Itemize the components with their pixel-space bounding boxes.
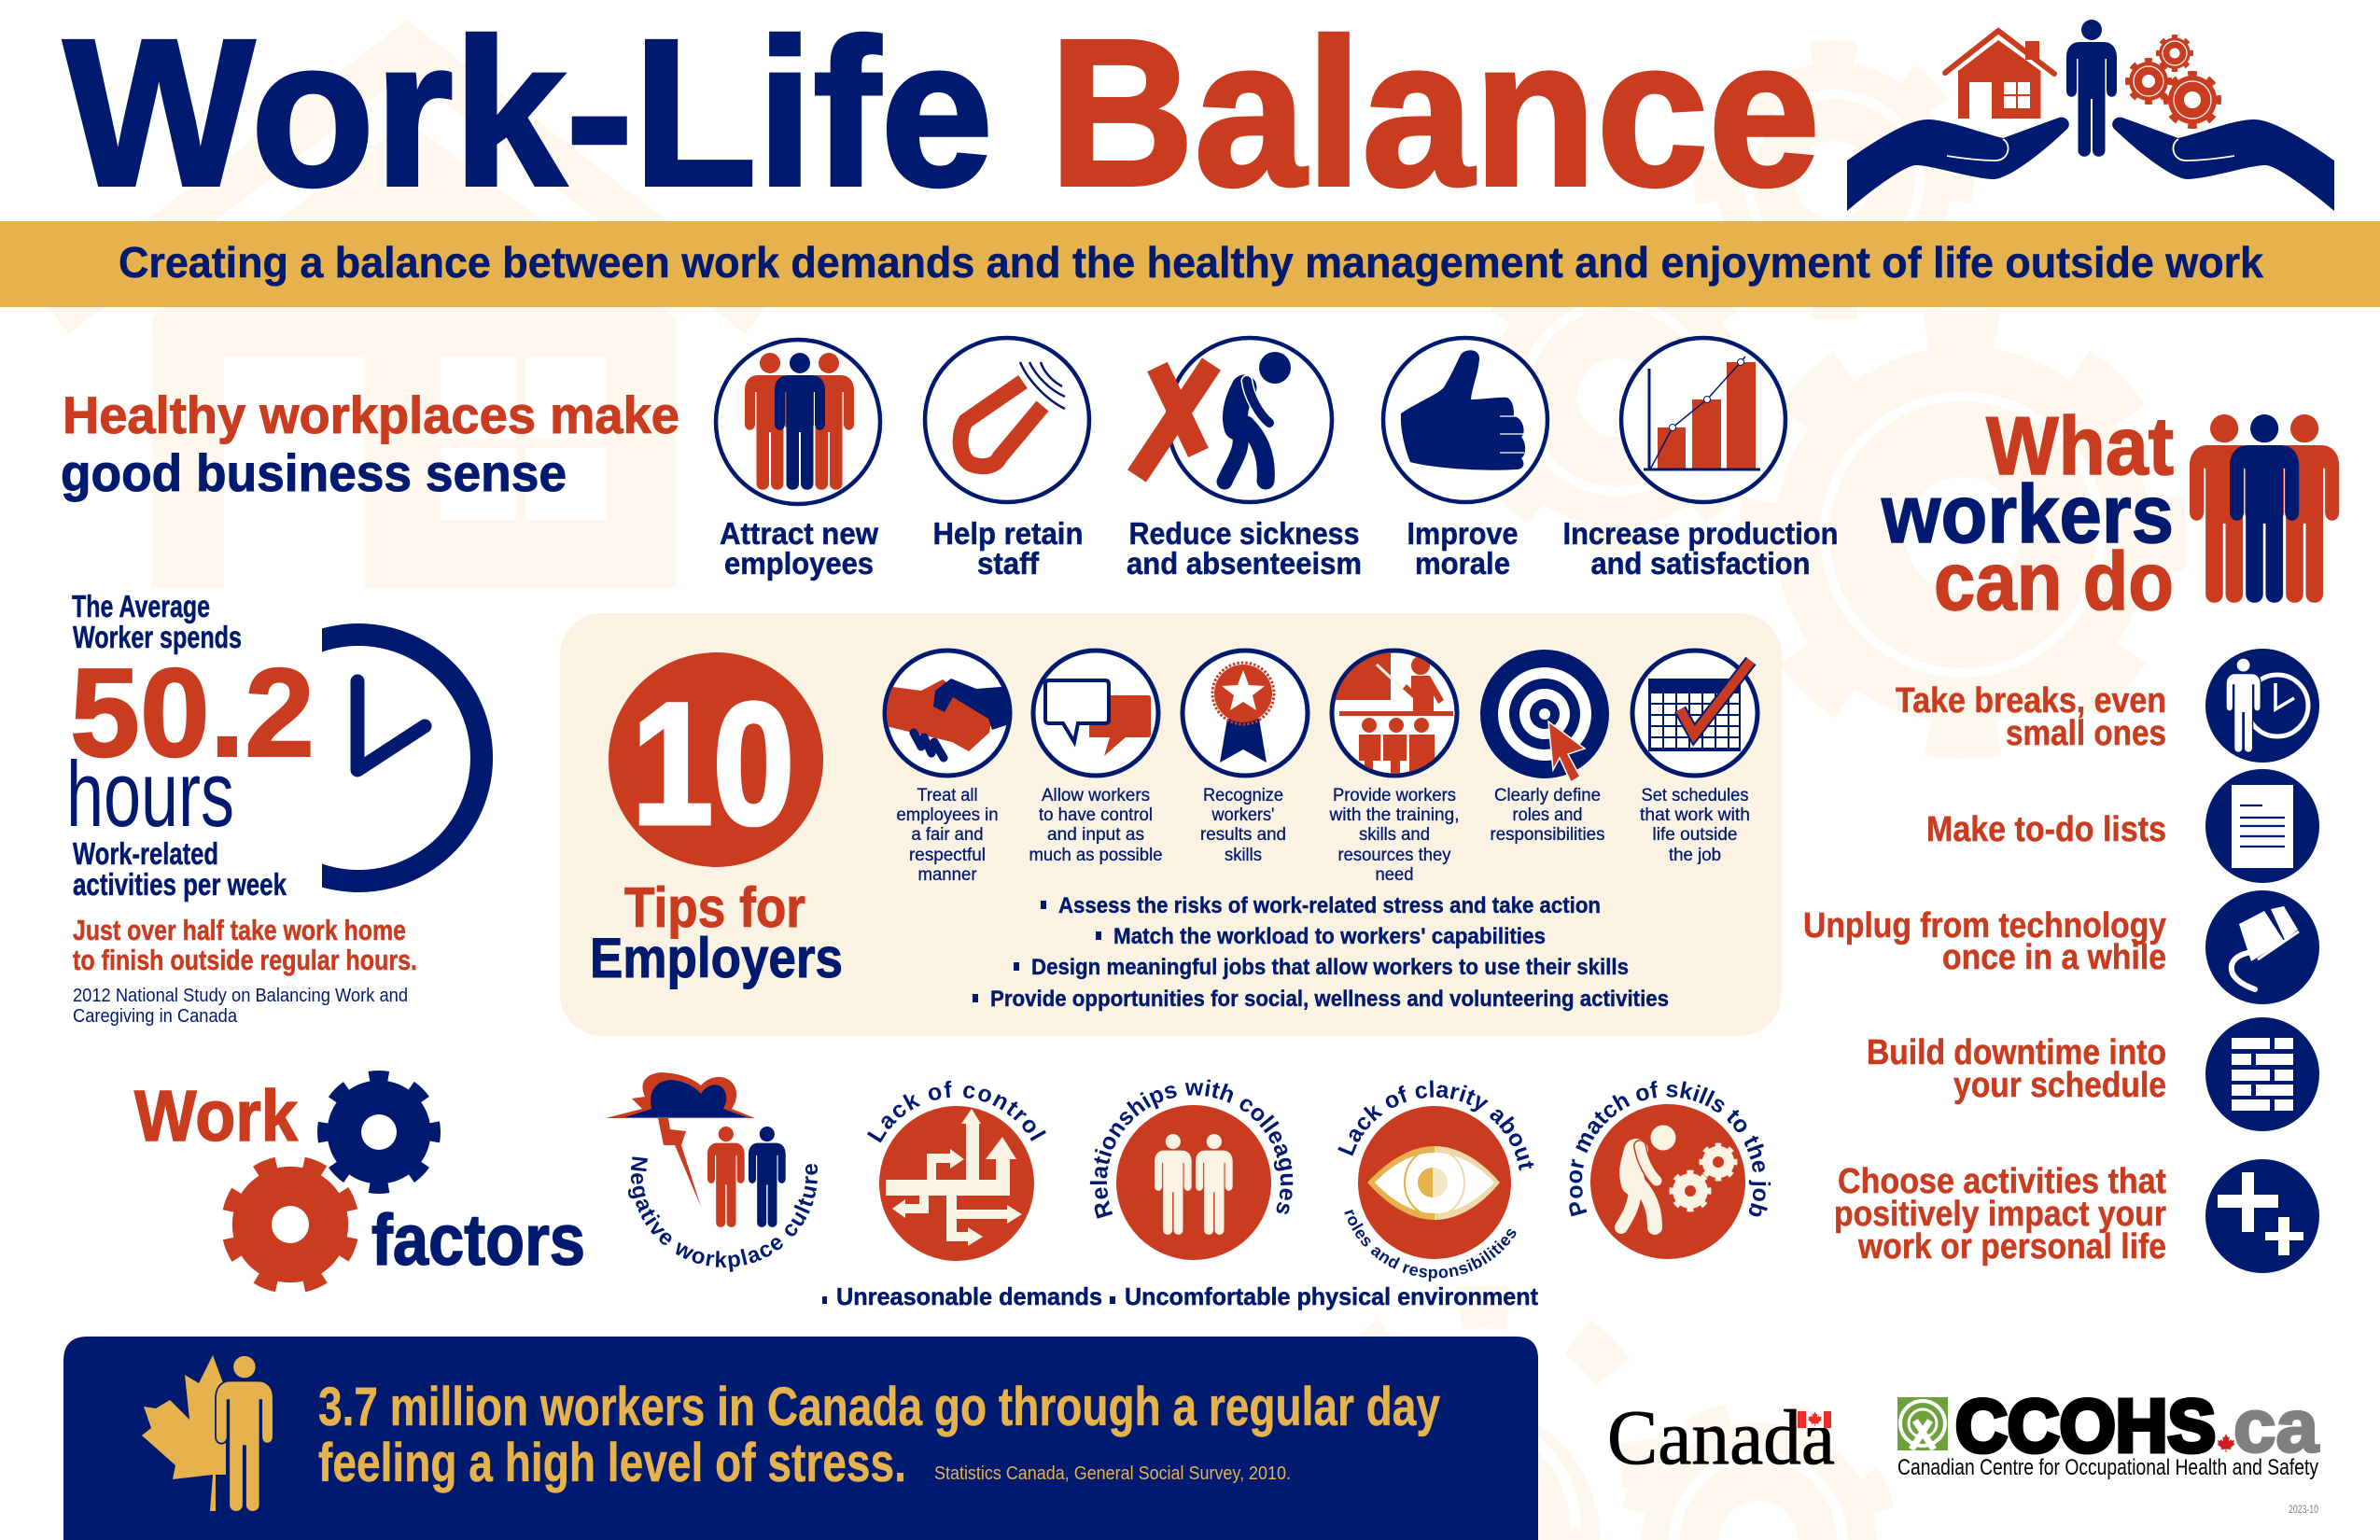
- tip: treat all employees fairly: Treat all: [917, 786, 978, 805]
- tip: allow control and input: [1029, 651, 1163, 865]
- tip: allow control and input: Allow workers: [1042, 786, 1150, 805]
- logo: CCOHS: ca: [2233, 1384, 2319, 1467]
- factor: relationships with colleagues: Relationships with colleagues: [1090, 1079, 1294, 1219]
- benefit: help retain staff: staff: [977, 546, 1040, 581]
- tip: treat all employees fairly: [885, 651, 1012, 885]
- heading: work factors with gears: factors: [371, 1200, 585, 1281]
- source note: Caregiving in Canada: [73, 1006, 238, 1027]
- tip: treat all employees fairly: employees in: [896, 805, 999, 825]
- tips list: Assess the risks of work-related stress and take action: [1058, 893, 1601, 918]
- heading: healthy workplaces: good business sense: [61, 443, 567, 502]
- heading: work factors with gears: [134, 1076, 585, 1304]
- benefit: increase production: [1562, 338, 1839, 581]
- action: take breaks: [1896, 649, 2319, 763]
- logo: CCOHS: CCOHS: [1955, 1384, 2216, 1467]
- title: Work-Life: [63, 0, 993, 230]
- title: Balance: [1049, 0, 1820, 230]
- action: to-do lists: Make to-do lists: [1926, 810, 2166, 849]
- tip: provide training: with the training,: [1328, 805, 1460, 825]
- tip: recognize results: skills: [1225, 846, 1262, 865]
- heading: tips for employers: [590, 876, 843, 989]
- text: work-related activities: activities per week: [73, 867, 287, 902]
- stat: 50.2 hours: [66, 642, 315, 846]
- factor: negative workplace culture: Negative workplace culture: [627, 1156, 818, 1272]
- other factors line: Uncomfortable physical environment: [1125, 1282, 1538, 1310]
- tip: provide training: need: [1376, 865, 1413, 885]
- text: stress statistic: feeling a high level of stress.: [318, 1433, 906, 1493]
- heading: what workers can do: workers: [1881, 468, 2174, 560]
- tip: recognize results: Recognize: [1203, 786, 1283, 805]
- heading: healthy workplaces: Healthy workplaces make: [63, 385, 679, 444]
- heading: what workers can do: What: [1986, 399, 2174, 492]
- tip: allow control and input: much as possible: [1029, 846, 1163, 865]
- action: choose activities: work or personal life: [1857, 1227, 2166, 1267]
- action: build downtime: Build downtime into: [1867, 1033, 2166, 1072]
- text: work-related activities: Work-related: [73, 836, 218, 871]
- benefit: reduce sickness: and absenteeism: [1127, 546, 1362, 581]
- tip: allow control and input: to have control: [1039, 805, 1153, 825]
- action: take breaks: Take breaks, even: [1896, 681, 2166, 721]
- tip: recognize results: workers': [1211, 805, 1275, 825]
- factor: lack of clarity: roles and responsibilities: [1344, 1210, 1516, 1282]
- icon: clock: [322, 623, 493, 892]
- other factors line: Unreasonable demands: [836, 1282, 1102, 1310]
- benefit: improve morale: Improve: [1407, 516, 1518, 551]
- tip: define roles: roles and: [1512, 805, 1583, 825]
- heading: tips for employers: Tips for: [624, 876, 805, 939]
- tip: set schedules: Set schedules: [1641, 786, 1749, 805]
- tip: provide training: Provide workers: [1333, 786, 1456, 805]
- tip: define roles: [1480, 650, 1609, 845]
- action: unplug: [1803, 890, 2319, 1004]
- factor: lack of control: Lack of control: [867, 1081, 1046, 1142]
- text: stress statistic: 3.7 million workers in Canada go through a regular day: [318, 1377, 1440, 1437]
- benefit: increase production: and satisfaction: [1590, 546, 1811, 581]
- icon: three workers: [2190, 414, 2339, 603]
- tip: recognize results: results and: [1200, 825, 1286, 845]
- factor: lack of clarity: Lack of clarity about: [1337, 1081, 1534, 1170]
- heading: what workers can do: [1881, 399, 2174, 627]
- tip: treat all employees fairly: respectful: [909, 846, 986, 865]
- subtitle band: Creating a balance between work demands and the healthy management and enjoyment of life outside work: [119, 238, 2263, 287]
- tip: allow control and input: and input as: [1047, 825, 1144, 845]
- heading: what workers can do: can do: [1934, 535, 2174, 627]
- benefit: reduce sickness: Reduce sickness: [1129, 516, 1359, 551]
- logo: Canada wordmark: Canada: [1607, 1394, 1835, 1481]
- action: to-do lists: [1926, 769, 2319, 883]
- tip: set schedules: that work with: [1640, 805, 1750, 825]
- title: [63, 0, 1820, 230]
- benefit: attract new employees: Attract new: [720, 516, 878, 551]
- factor: negative workplace culture: [606, 1072, 818, 1272]
- action: choose activities: Choose activities that: [1838, 1162, 2166, 1201]
- stat: 50.2 hours: hours: [66, 742, 234, 846]
- factor: lack of control: [867, 1081, 1046, 1261]
- action: unplug: Unplug from technology: [1803, 906, 2166, 945]
- other factors line: [822, 1282, 1538, 1310]
- tip: treat all employees fairly: a fair and: [911, 825, 984, 845]
- text: stress statistic: [318, 1377, 1440, 1493]
- action: build downtime: [1867, 1017, 2319, 1131]
- factor: lack of clarity: [1337, 1081, 1534, 1282]
- tips list: Design meaningful jobs that allow workers to use their skills: [1031, 955, 1629, 980]
- benefit: reduce sickness: [1127, 338, 1362, 581]
- text: the average worker spends: Worker spends: [73, 620, 242, 654]
- tip: set schedules: life outside: [1652, 825, 1738, 845]
- benefit: increase production: Increase production: [1562, 516, 1839, 551]
- text: just over half: Just over half take work home: [73, 914, 406, 946]
- heading: tips for employers: Employers: [590, 927, 843, 989]
- subtitle band: [0, 221, 2380, 307]
- benefit: improve morale: morale: [1415, 546, 1510, 581]
- panel: average worker hours: [66, 589, 493, 1027]
- action: choose activities: [1834, 1159, 2319, 1273]
- heading: work factors with gears: Work: [134, 1076, 298, 1156]
- text: work-related activities: [73, 836, 287, 902]
- text: just over half: to finish outside regular hours.: [73, 944, 417, 976]
- benefit: help retain staff: [925, 338, 1089, 581]
- tip: define roles: Clearly define: [1494, 786, 1601, 805]
- panel: what workers can do: [1803, 399, 2339, 1273]
- text: the average worker spends: The Average: [72, 589, 210, 623]
- tip: set schedules: [1632, 651, 1757, 865]
- factor: poor match of skills: Poor match of skills to the job: [1569, 1081, 1771, 1217]
- tips list: Provide opportunities for social, wellness and volunteering activities: [990, 987, 1669, 1012]
- stat: 50.2 hours: 50.2: [70, 642, 315, 783]
- date code: 2023-10: [2289, 1503, 2318, 1516]
- source note: 2012 National Study on Balancing Work and: [73, 986, 408, 1006]
- text: the average worker spends: [72, 589, 242, 654]
- tip: provide training: [1328, 649, 1460, 885]
- panel: 10 tips for employers: [560, 613, 1782, 1036]
- source note: [73, 986, 408, 1027]
- tips list: Match the workload to workers' capabilities: [1113, 924, 1546, 949]
- badge: 10: 10: [632, 668, 794, 861]
- logo: CCOHS: [1897, 1384, 2319, 1480]
- benefit: improve morale: [1383, 338, 1547, 581]
- text: just over half: [73, 914, 417, 976]
- icon: maple leaf and worker: [142, 1355, 273, 1512]
- icon: hands holding home, worker and gears: [1847, 20, 2334, 211]
- tip: recognize results: [1183, 651, 1308, 865]
- tip: define roles: responsibilities: [1490, 825, 1605, 845]
- tip: provide training: resources they: [1338, 846, 1451, 865]
- heading: healthy workplaces: [61, 385, 679, 502]
- callout: 3.7 million workers: [63, 1337, 1538, 1540]
- action: choose activities: positively impact your: [1834, 1195, 2166, 1234]
- tips list: [973, 893, 1669, 1012]
- tip: provide training: skills and: [1359, 825, 1430, 845]
- action: build downtime: your schedule: [1953, 1066, 2166, 1105]
- panel: work factors: [133, 1071, 1771, 1310]
- source note: Statistics Canada, General Social Survey, 2010.: [934, 1463, 1291, 1484]
- tip: set schedules: the job: [1669, 846, 1721, 865]
- benefit: attract new employees: employees: [724, 546, 874, 581]
- benefit: help retain staff: Help retain: [933, 516, 1083, 551]
- tip: treat all employees fairly: manner: [918, 865, 977, 885]
- action: take breaks: small ones: [2006, 714, 2166, 753]
- action: unplug: once in a while: [1942, 938, 2166, 977]
- benefit: attract new employees: [716, 340, 880, 581]
